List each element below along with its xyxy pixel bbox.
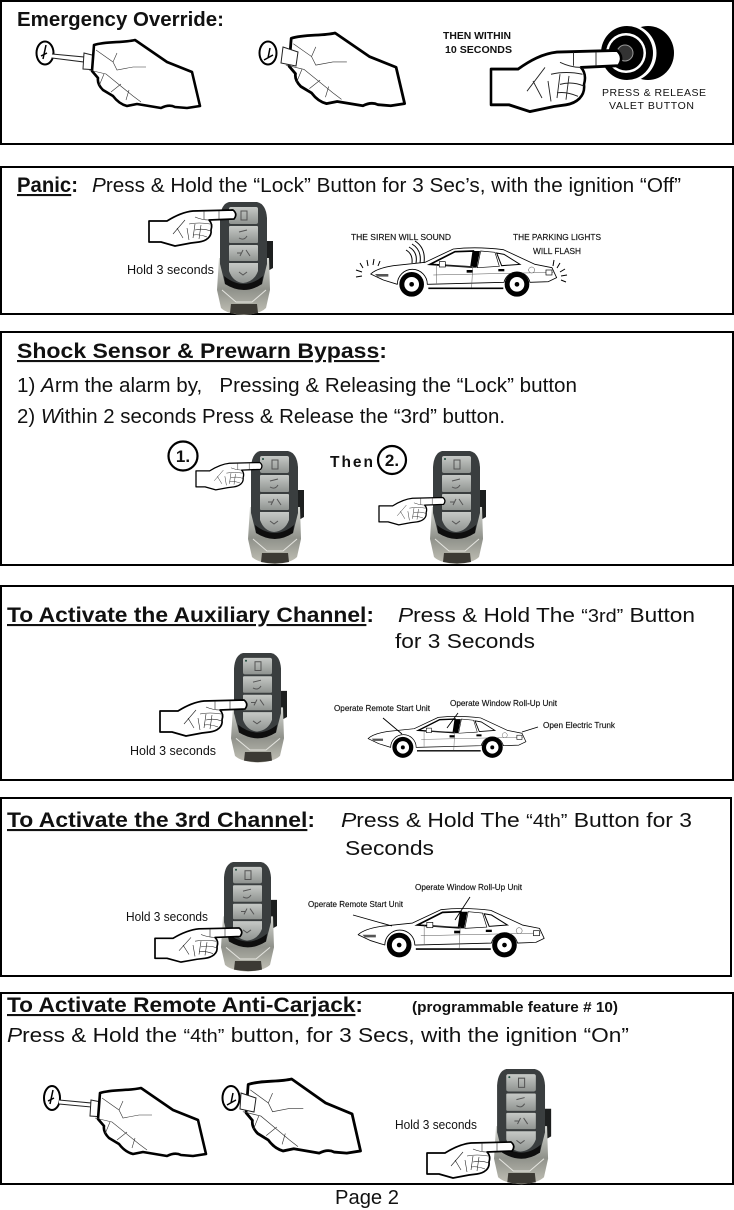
panel: third channel — [1, 798, 731, 976]
marker: step 2: 2. — [385, 451, 399, 470]
marker: step 1 — [168, 442, 198, 470]
text: press and release valet button — [602, 87, 706, 112]
text: then within 10 seconds: THEN WITHIN — [443, 31, 511, 42]
captions: auxiliary options with leader lines: Open Electric Trunk — [543, 720, 616, 730]
captions: third channel options with leader lines — [308, 882, 523, 926]
text: press and release valet button: PRESS & RELEASE — [602, 87, 706, 99]
marker: step 1: 1. — [176, 447, 190, 466]
icon: key ring and hand, key turned — [222, 1079, 361, 1153]
icon: hand on fourth button — [155, 928, 242, 962]
label: hold 3 seconds: Hold 3 seconds — [127, 263, 214, 277]
text: then within 10 seconds — [443, 31, 512, 56]
icon: key fob — [494, 1069, 551, 1184]
icon: key ring and hand, key inserted long — [44, 1086, 206, 1156]
car with channel options — [368, 716, 526, 758]
icon: key ring and hand, key turned — [260, 33, 405, 106]
label: hold 3 seconds: Hold 3 seconds — [395, 1118, 477, 1132]
captions: car effects: THE SIREN WILL SOUND — [351, 232, 451, 242]
text: panic instruction: Press & Hold the “Lock” Button for 3 Sec’s, with the ignition “Off” — [92, 174, 681, 197]
heading: auxiliary channel: To Activate the Auxiliary Channel : — [7, 604, 374, 627]
text: step 1: 1) Arm the alarm by, Pressing & Releasing the “Lock” button — [17, 374, 577, 397]
text: auxiliary instruction — [395, 604, 695, 653]
icon: key fob — [217, 202, 273, 315]
text: third channel instruction: Press & Hold The “4th” Button for 3 — [341, 809, 692, 832]
text: auxiliary instruction: for 3 Seconds — [395, 630, 535, 653]
panel: emergency override — [1, 1, 733, 144]
text: third channel instruction — [341, 809, 692, 860]
label: hold 3 seconds: Hold 3 seconds — [130, 744, 216, 758]
text: anti-carjack instruction: Press & Hold the “4th” button, for 3 Secs, with the ignition “On” — [7, 1024, 629, 1047]
panel: panic — [1, 167, 733, 315]
captions: car effects — [351, 232, 601, 256]
label: hold 3 seconds: Hold 3 seconds — [126, 910, 208, 924]
marker: step 2 — [378, 446, 406, 474]
icon: key fob — [231, 653, 287, 763]
captions: auxiliary options with leader lines — [334, 698, 616, 734]
icon: hand on lock button — [149, 210, 236, 246]
icon: valet button — [600, 24, 674, 82]
text: then within 10 seconds: 10 SECONDS — [445, 45, 512, 56]
captions: auxiliary options with leader lines: Operate Window Roll-Up Unit — [450, 698, 558, 708]
panel: auxiliary channel — [1, 586, 733, 780]
icon: hand on third button — [379, 498, 445, 525]
icon: key ring and hand, key inserted long — [36, 40, 200, 108]
heading: remote anti-carjack: To Activate Remote Anti-Carjack : — [7, 994, 363, 1017]
car with channel options — [358, 909, 544, 957]
page number: Page 2 — [335, 1186, 399, 1209]
captions: auxiliary options with leader lines: Operate Remote Start Unit — [334, 703, 431, 713]
icon: key fob step 2 — [430, 451, 486, 564]
captions: third channel options with leader lines: Operate Remote Start Unit — [308, 899, 404, 909]
captions: third channel options with leader lines: Operate Window Roll-Up Unit — [415, 882, 523, 892]
heading: emergency override: Emergency Override: — [17, 9, 224, 31]
panel: shock sensor and prewarn bypass — [1, 332, 733, 565]
heading: shock sensor: Shock Sensor & Prewarn Bypass : — [17, 340, 387, 363]
heading: third channel: To Activate the 3rd Channel : — [7, 809, 315, 832]
text: press and release valet button: VALET BUTTON — [609, 100, 694, 112]
label: then: Then — [330, 454, 373, 471]
icon: key fob step 1 — [248, 451, 304, 564]
text: third channel instruction: Seconds — [345, 837, 434, 860]
text: step 2: 2) Within 2 seconds Press & Release the “3rd” button. — [17, 405, 505, 428]
icon: key fob — [221, 862, 277, 972]
panel: remote anti-carjack — [1, 993, 733, 1184]
heading: panic: Panic: — [17, 174, 78, 197]
icon: hand on lock button — [196, 463, 262, 490]
captions: car effects: WILL FLASH — [533, 246, 581, 256]
car with siren and flashing lights — [356, 241, 567, 297]
text: auxiliary instruction: Press & Hold The “3rd” Button — [398, 604, 695, 627]
icon: hand on third button — [160, 700, 247, 736]
captions: car effects: THE PARKING LIGHTS — [513, 232, 601, 242]
icon: hand pressing valet button — [491, 50, 621, 112]
icon: hand on fourth button — [427, 1142, 514, 1178]
note: programmable feature: (programmable feature # 10) — [412, 1000, 618, 1016]
